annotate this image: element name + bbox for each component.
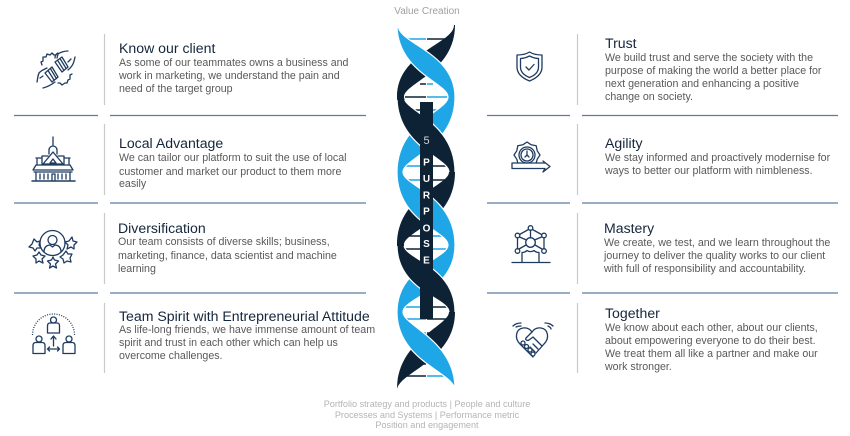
description: As life-long friends, we have immense amount of team	[119, 324, 375, 336]
heading: Local Advantage	[119, 135, 223, 151]
icon: temple	[32, 137, 75, 181]
description: Our team consists of diverse skills; business,	[118, 236, 330, 248]
panel: diversification	[29, 220, 337, 275]
description: learning	[118, 263, 156, 275]
column label: 5 purpose	[423, 135, 431, 266]
description: work in marketing, we understand the pain and	[118, 70, 340, 82]
description: We create, we test, and we learn throughout the	[604, 237, 830, 249]
description: next generation and enhancing a positive	[605, 78, 799, 90]
panel: together	[513, 305, 818, 373]
column label: 5 purpose: O	[423, 224, 431, 234]
purpose column	[420, 102, 433, 319]
panel: team spirit	[32, 308, 375, 362]
icon: person with stars	[29, 230, 77, 268]
dark strand overlap at crossing two	[397, 100, 455, 172]
column label: 5 purpose: 5	[423, 135, 430, 147]
icon: fist bump	[37, 51, 75, 88]
caption: value creation: Value Creation	[394, 6, 460, 17]
description	[605, 52, 822, 103]
heading: Together	[605, 305, 660, 321]
description: change on society.	[605, 91, 693, 103]
heading: Know our client	[119, 40, 215, 56]
caption: portfolio and engagement: Portfolio strategy and products | People and culture	[324, 399, 530, 409]
dividers	[14, 116, 838, 293]
rungs	[405, 39, 448, 376]
panel: agility	[512, 135, 831, 177]
description: ways to better our platform with nimbleness.	[604, 165, 813, 177]
description: purpose of making the world a better place for	[605, 65, 822, 77]
description	[118, 236, 337, 275]
description: spirit and trust in each other which can help us	[119, 337, 338, 349]
column label: 5 purpose: P	[423, 158, 430, 168]
icon: atom structure	[512, 226, 550, 262]
description: customer and market our product to them more	[119, 166, 341, 178]
description: marketing, finance, data scientist and machine	[118, 250, 337, 262]
heading: Agility	[605, 135, 644, 151]
description	[604, 322, 818, 373]
dna helix	[397, 25, 455, 389]
description	[604, 152, 831, 177]
dark strand	[397, 25, 455, 389]
icon: shield	[517, 52, 542, 81]
column label: 5 purpose: U	[423, 174, 430, 185]
description: journey to deliver the quality works to our client	[603, 250, 825, 262]
caption: portfolio and engagement	[324, 399, 530, 430]
description: We build trust and serve the society with the	[605, 52, 813, 64]
panel: mastery	[512, 220, 830, 275]
heading: Trust	[605, 35, 637, 51]
description: need of the target group	[119, 83, 233, 95]
description: about empowering everyone to do their best.	[605, 335, 816, 347]
panel: know our client	[37, 40, 349, 95]
description	[118, 57, 349, 95]
column label: 5 purpose: E	[423, 256, 430, 266]
column label: 5 purpose: R	[423, 190, 431, 202]
description: easily	[119, 178, 147, 190]
description: We know about each other, about our clients,	[605, 322, 818, 334]
caption: portfolio and engagement: Position and engagement	[375, 420, 479, 430]
description	[603, 237, 830, 275]
dark strand overlap at crossing four	[397, 246, 455, 312]
description	[119, 324, 375, 362]
icon: clock gear with arrow	[512, 142, 550, 172]
description: We treat them all like a partner and make our	[605, 348, 818, 360]
heading: Team Spirit with Entrepreneurial Attitude	[119, 308, 370, 324]
icon: team network	[32, 314, 75, 354]
description: overcome challenges.	[119, 350, 223, 362]
description: We stay informed and proactively modernise for	[605, 152, 831, 164]
panel: local advantage	[32, 135, 347, 190]
blue strand	[397, 25, 455, 389]
description	[119, 152, 347, 190]
heading: Diversification	[118, 220, 206, 236]
description: work stronger.	[604, 361, 672, 373]
heading: Mastery	[604, 220, 655, 236]
description: As some of our teammates owns a business and	[119, 57, 349, 69]
panel: trust	[517, 35, 822, 103]
description: with full of responsibility and accountability.	[603, 263, 806, 275]
icon: handshake heart	[513, 323, 553, 357]
description: We can tailor our platform to suit the use of local	[119, 152, 347, 164]
column label: 5 purpose: P	[423, 206, 430, 218]
caption: portfolio and engagement: Processes and Systems | Performance metric	[335, 410, 520, 420]
column label: 5 purpose: S	[423, 239, 430, 250]
